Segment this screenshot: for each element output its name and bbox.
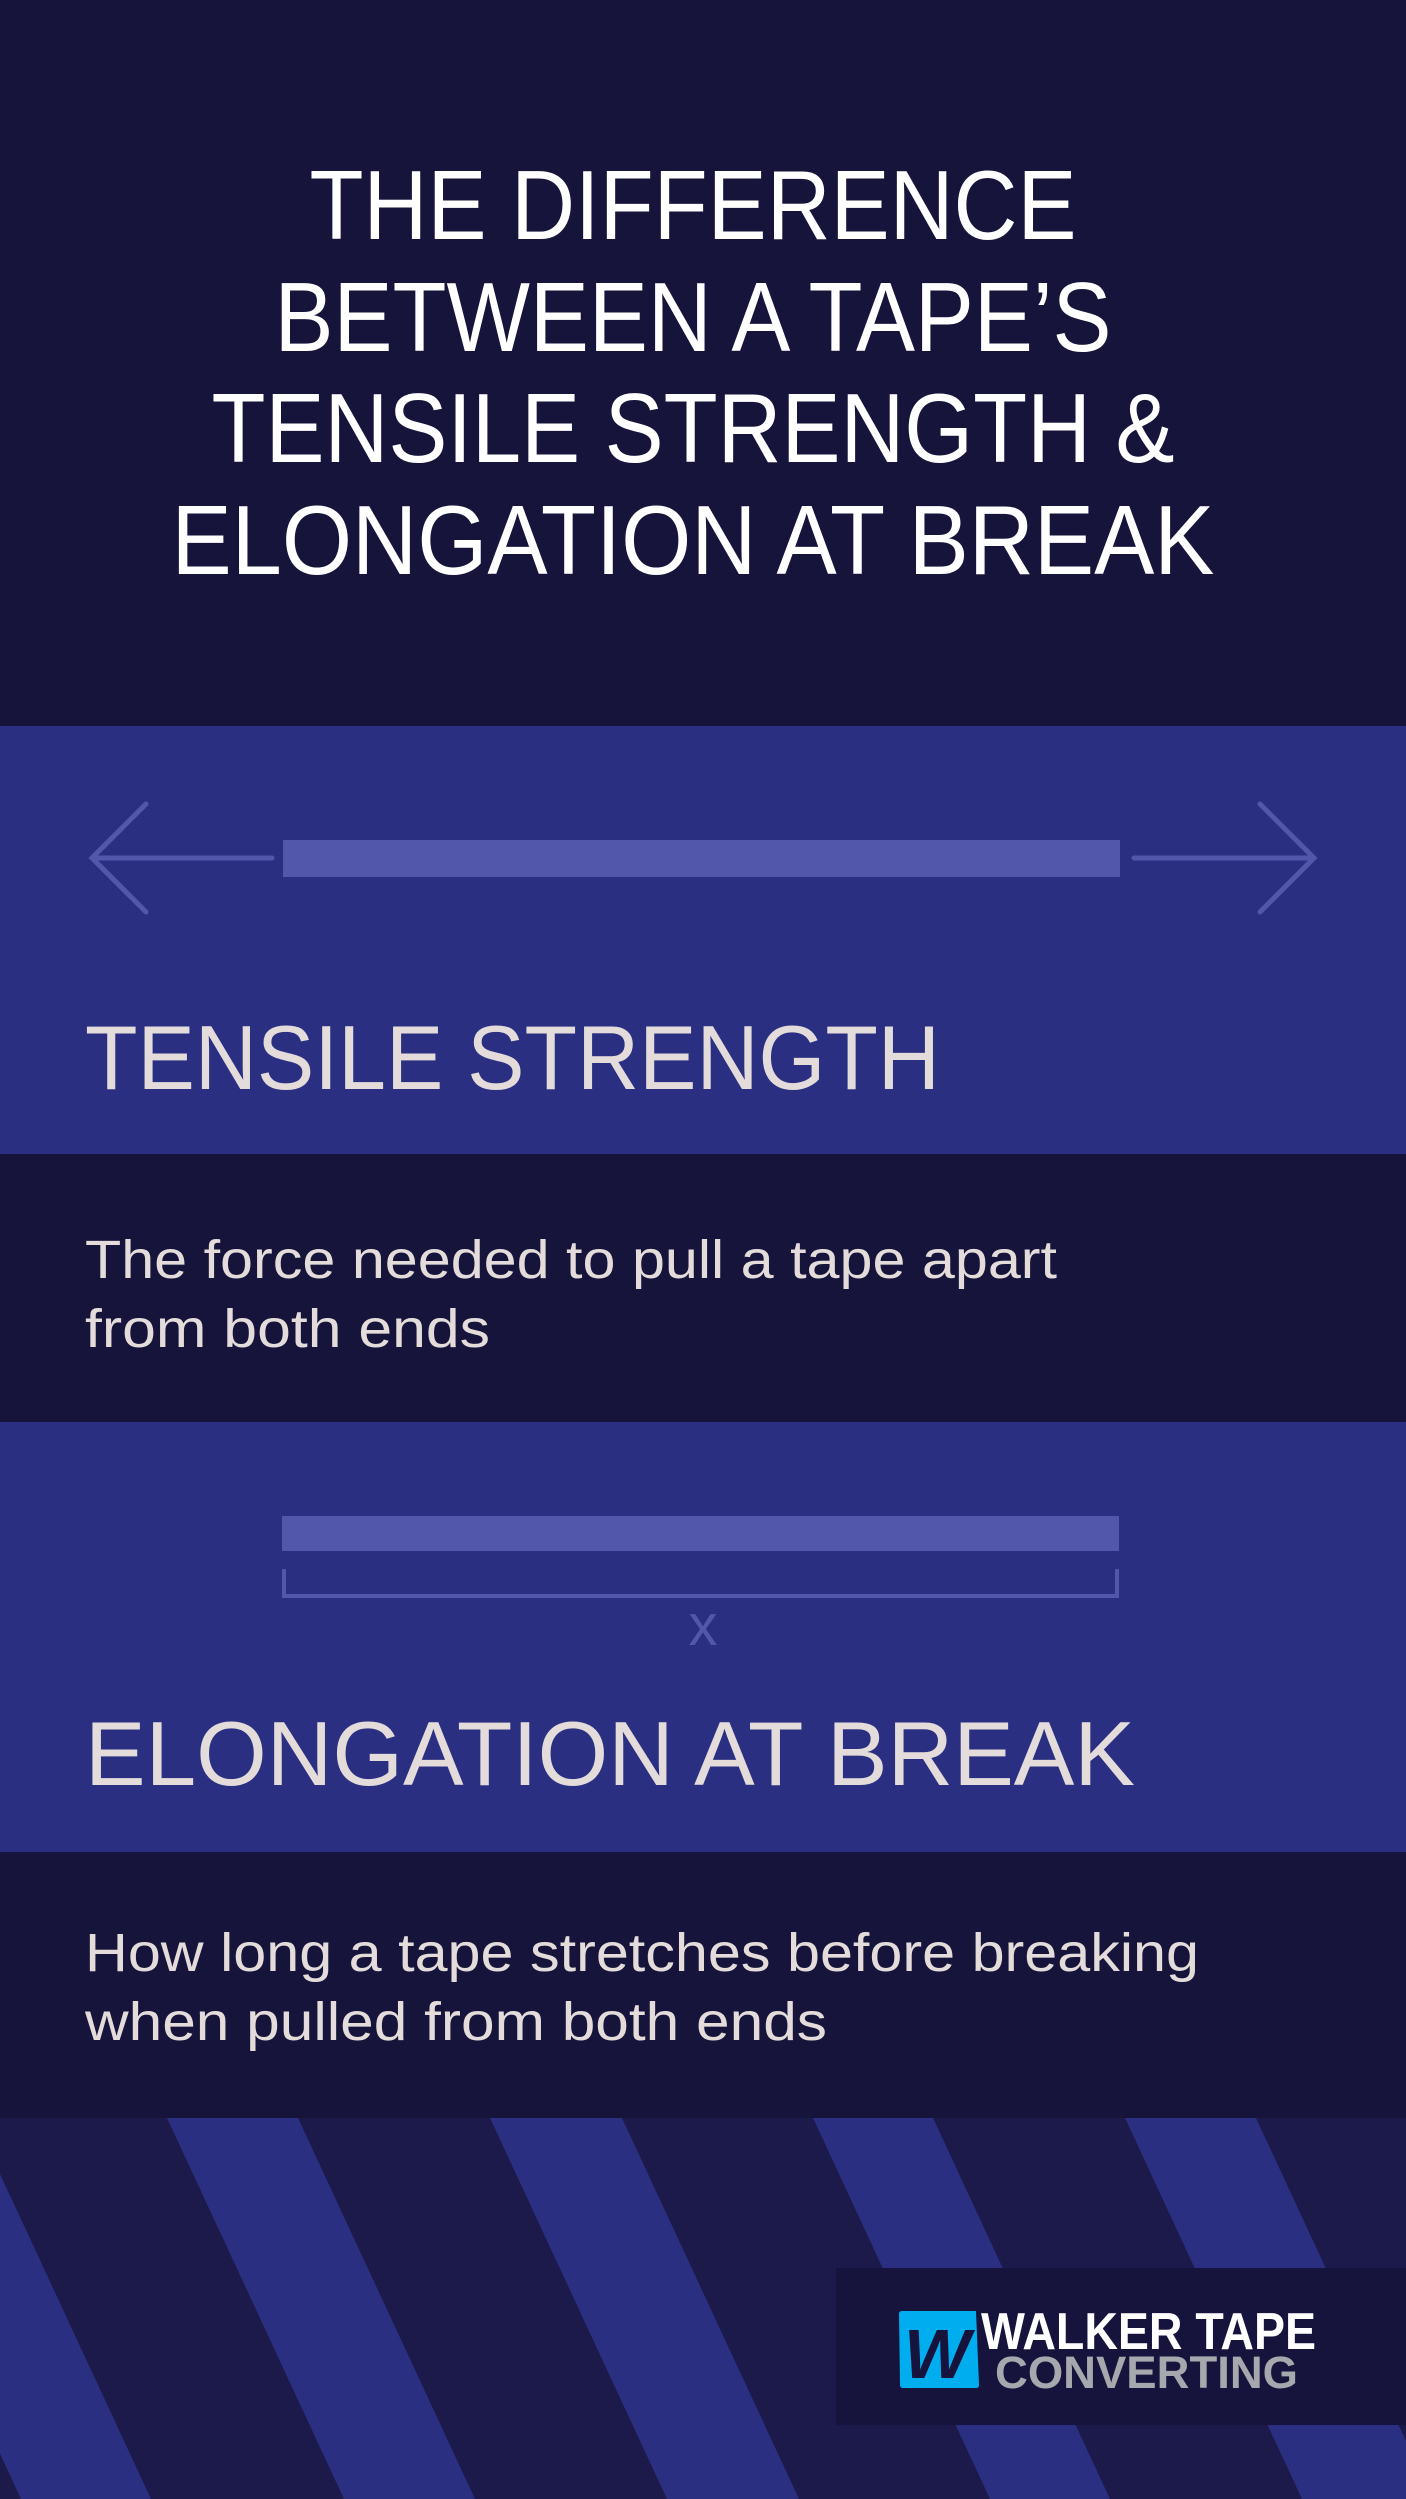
label: x: x <box>688 1593 718 1658</box>
text: tensile definition <box>85 1230 1057 1359</box>
text: tensile definition: The force needed to pull a tape apart <box>85 1230 1057 1290</box>
panel: elongation description <box>0 1852 1406 2118</box>
title: BETWEEN A TAPE’S <box>274 262 1112 372</box>
title: THE DIFFERENCE <box>310 150 1076 260</box>
text: elongation definition <box>84 1923 1199 2052</box>
icon: measurement bracket <box>284 1569 1117 1596</box>
icon: right arrow <box>1134 804 1314 912</box>
logo: walker tape converting: CONVERTING <box>995 2347 1298 2398</box>
panel: title band <box>0 0 1406 727</box>
panel: striped footer <box>0 2118 1406 2499</box>
title: ELONGATION AT BREAK <box>172 485 1214 595</box>
panel: tensile strength <box>0 726 1406 1154</box>
text: tensile definition: from both ends <box>85 1299 490 1359</box>
text: elongation definition: How long a tape stretches before breaking <box>85 1923 1199 1983</box>
icon: left arrow <box>92 804 272 912</box>
panel: elongation at break <box>0 1422 1406 1852</box>
icon: W mark: W <box>904 2315 976 2393</box>
logo: walker tape converting <box>836 2268 1406 2425</box>
logo text: WALKER TAPE <box>981 2303 1316 2361</box>
icon: tape bar <box>283 840 1120 877</box>
heading: elongation at break: ELONGATION AT BREAK <box>85 1704 1135 1805</box>
text: elongation definition: when pulled from both ends <box>84 1992 827 2052</box>
heading: tensile strength: TENSILE STRENGTH <box>85 1008 940 1109</box>
panel: tensile description <box>0 1154 1406 1422</box>
icon: tape bar <box>282 1516 1119 1551</box>
title: TENSILE STRENGTH & <box>212 373 1174 483</box>
title <box>172 150 1214 595</box>
